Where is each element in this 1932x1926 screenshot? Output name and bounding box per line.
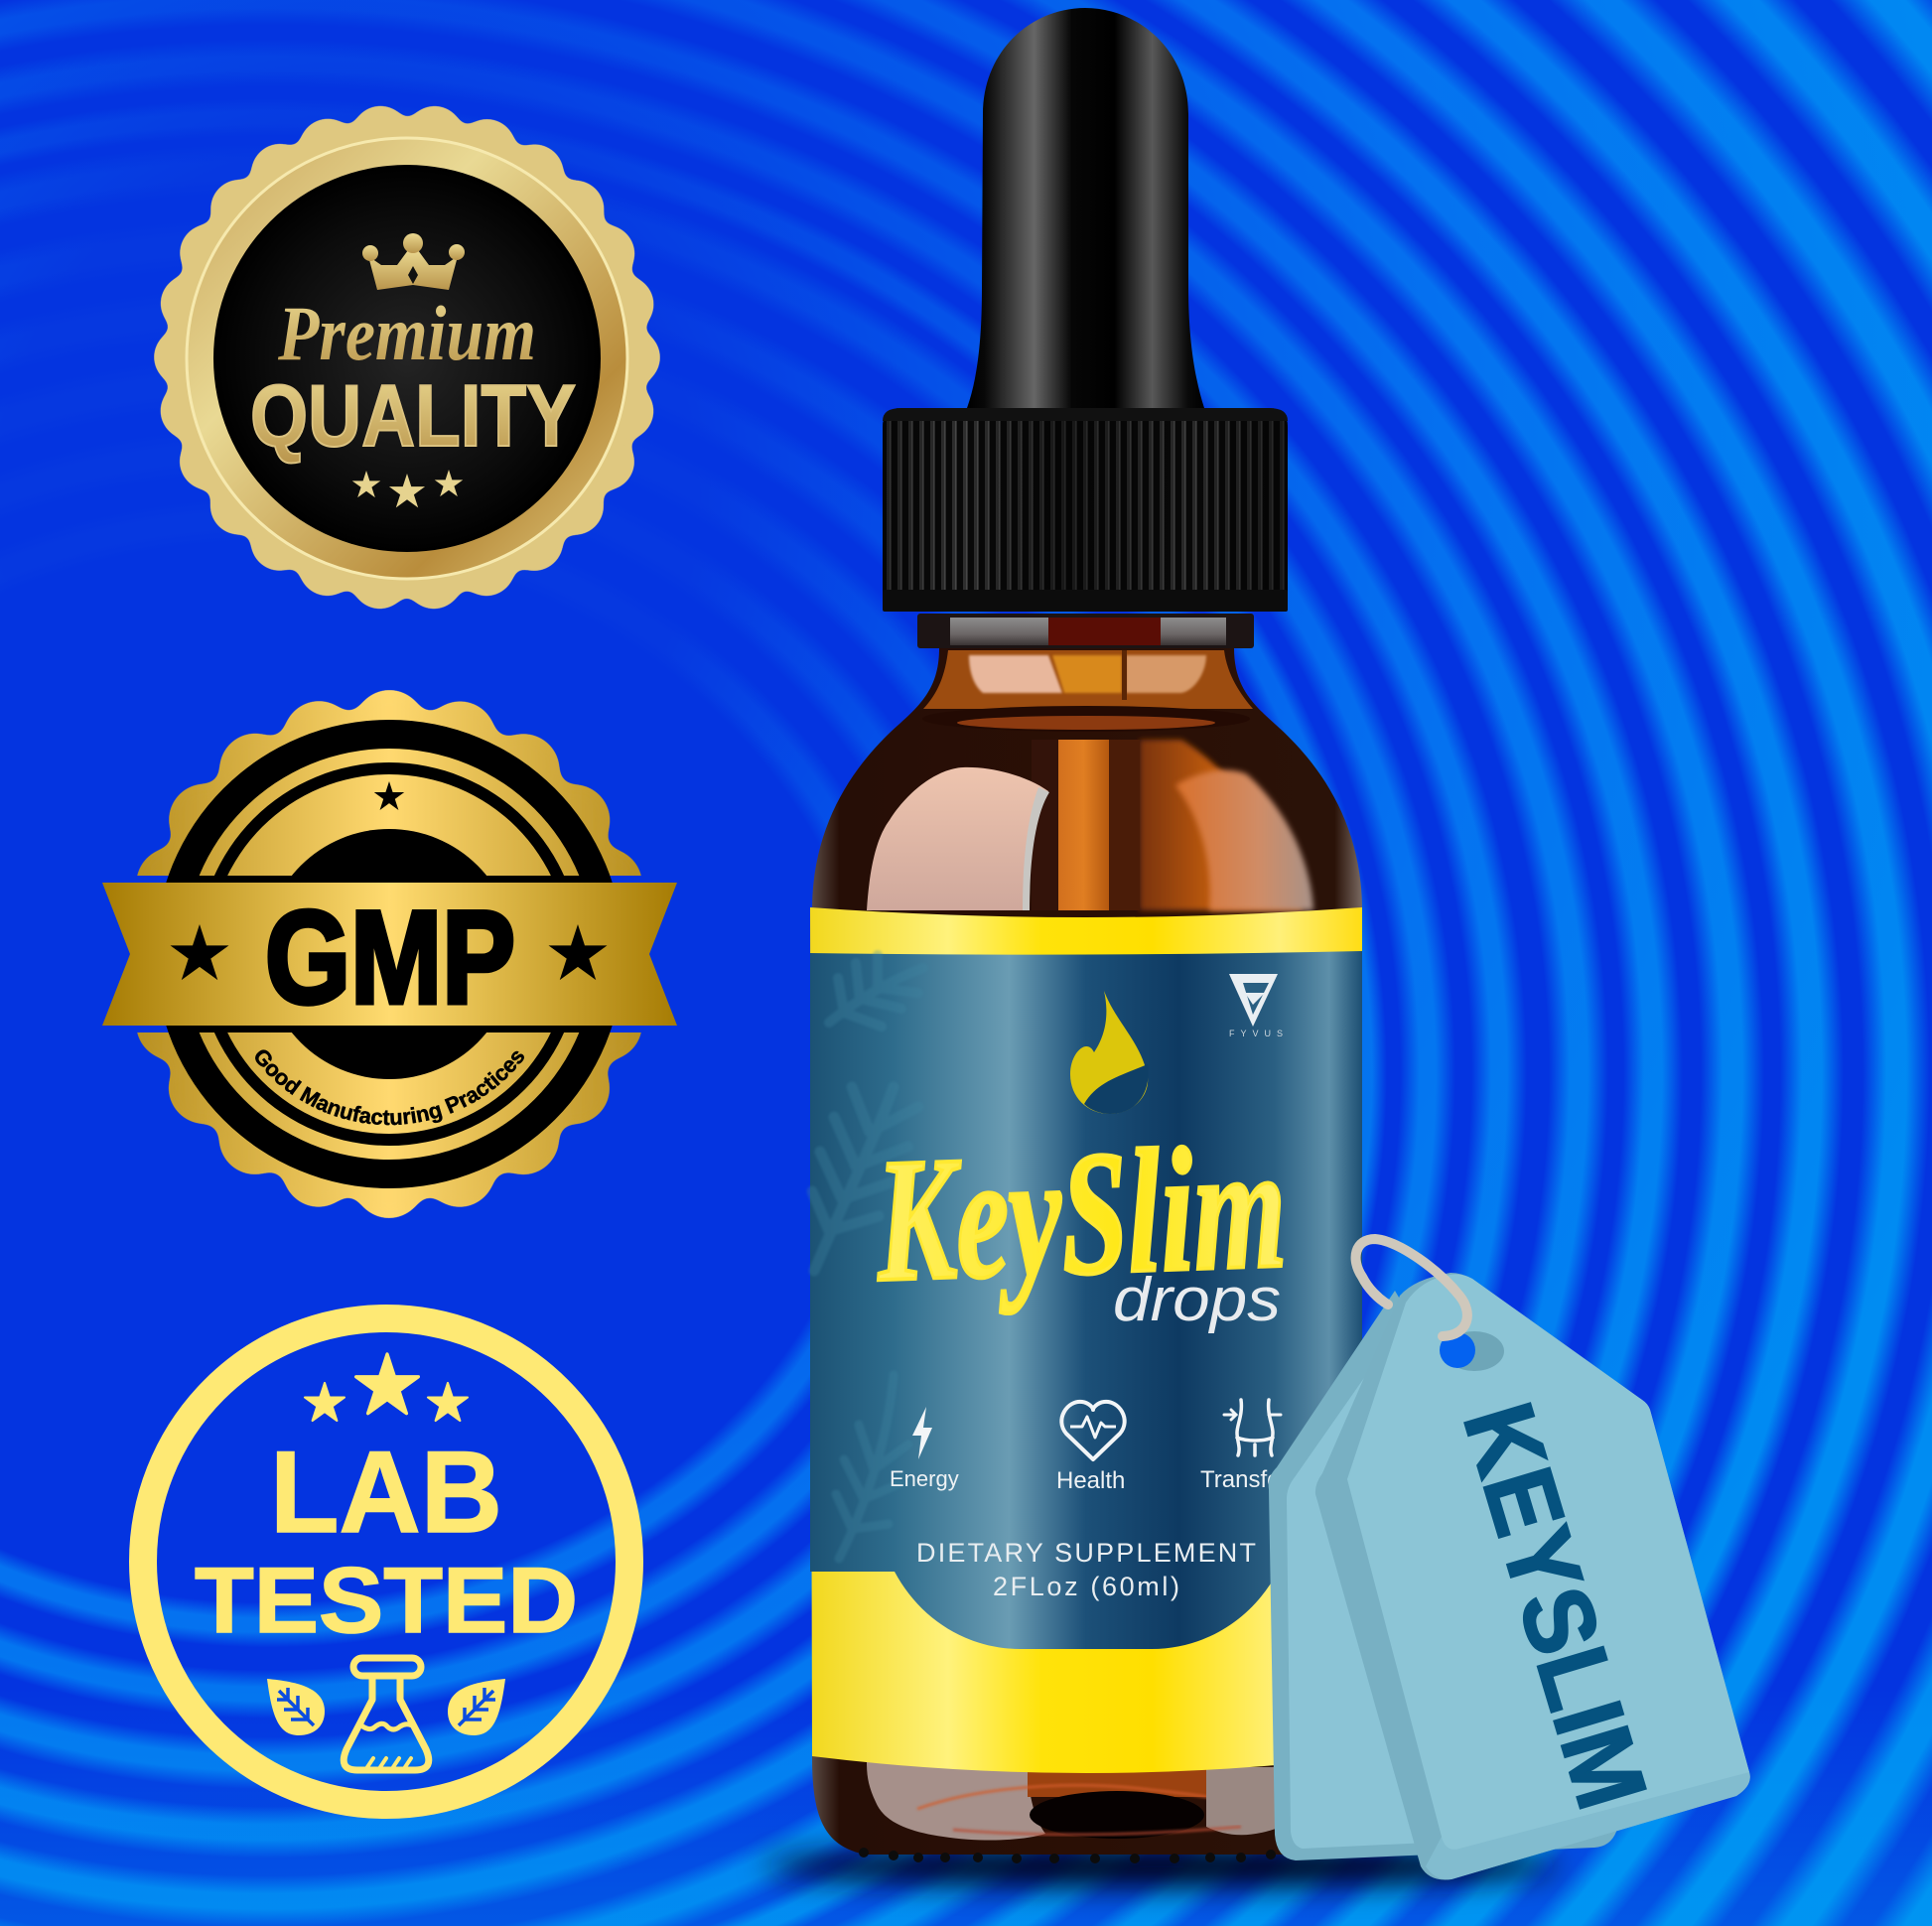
label fronds bbox=[812, 955, 923, 1559]
transform label: Transform bbox=[1200, 1466, 1308, 1493]
icon: heart with pulse bbox=[1061, 1402, 1125, 1459]
badge: Lab Tested bbox=[143, 1318, 629, 1805]
rubber bulb bbox=[967, 8, 1204, 408]
QUALITY: QUALITY bbox=[250, 366, 576, 465]
amber glass body bbox=[812, 648, 1362, 1855]
flame drop logo bbox=[1070, 991, 1149, 1114]
curved caption: Good Manufacturing Practices bbox=[255, 1049, 524, 1126]
brand logo: FYVUS: FYVUS bbox=[1229, 1029, 1289, 1038]
black centre bbox=[213, 165, 601, 552]
bottom glass reflections bbox=[867, 1762, 1281, 1841]
KeySlim tag bbox=[1269, 1239, 1750, 1879]
energy label: Energy bbox=[890, 1466, 959, 1491]
badge: Premium Quality bbox=[169, 119, 645, 596]
ribbon bbox=[102, 883, 677, 1026]
back tag bbox=[1269, 1291, 1628, 1860]
badge: GMP bbox=[102, 690, 677, 1219]
Premium script: Premium bbox=[277, 290, 536, 376]
GMP letters: GMP bbox=[265, 885, 515, 1032]
base knurling dots bbox=[859, 1848, 1276, 1863]
volume line: 2FLoz (60ml) bbox=[993, 1572, 1179, 1601]
three stars bbox=[352, 470, 463, 507]
front tag body bbox=[1315, 1273, 1750, 1879]
dropper bottle bbox=[810, 8, 1362, 1863]
top star bbox=[374, 781, 404, 810]
front tag face bbox=[1347, 1275, 1749, 1850]
blue label panel bbox=[810, 951, 1362, 1649]
TESTED: TESTED bbox=[195, 1548, 578, 1652]
ribbed cap bbox=[883, 408, 1288, 612]
metal ring bbox=[1356, 1239, 1467, 1336]
icon: energy bolt bbox=[912, 1407, 932, 1459]
crown icon bbox=[362, 233, 465, 290]
tag text: KEYSLIM bbox=[1442, 1391, 1668, 1821]
flask icon bbox=[344, 1658, 429, 1770]
three stars bbox=[305, 1354, 468, 1421]
icon: waist bbox=[1224, 1400, 1281, 1455]
left leaf icon bbox=[267, 1679, 325, 1735]
neck ring bbox=[917, 614, 1254, 648]
health label: Health bbox=[1056, 1467, 1125, 1494]
bottom bevel bbox=[1426, 1772, 1750, 1879]
brand logo: FYVUS bbox=[1229, 974, 1289, 1038]
yellow label bbox=[810, 907, 1362, 1773]
scalloped gold edge bbox=[169, 119, 645, 596]
gold ring bbox=[187, 138, 627, 579]
seal body bbox=[143, 708, 635, 1200]
ribbon stars bbox=[171, 924, 607, 980]
outer ring bbox=[143, 1318, 629, 1805]
drops subtitle: drops bbox=[1113, 1266, 1281, 1334]
neck glass highlights bbox=[922, 650, 1253, 732]
dietary supplement line: DIETARY SUPPLEMENT bbox=[916, 1538, 1256, 1568]
KeySlim wordmark: KeySlim bbox=[872, 1108, 1289, 1318]
tag hole bbox=[1440, 1331, 1504, 1371]
LAB: LAB bbox=[270, 1427, 502, 1557]
right leaf icon bbox=[448, 1679, 505, 1735]
shoulder reflections bbox=[867, 740, 1313, 910]
bottle ground shadow bbox=[764, 1847, 1559, 1886]
